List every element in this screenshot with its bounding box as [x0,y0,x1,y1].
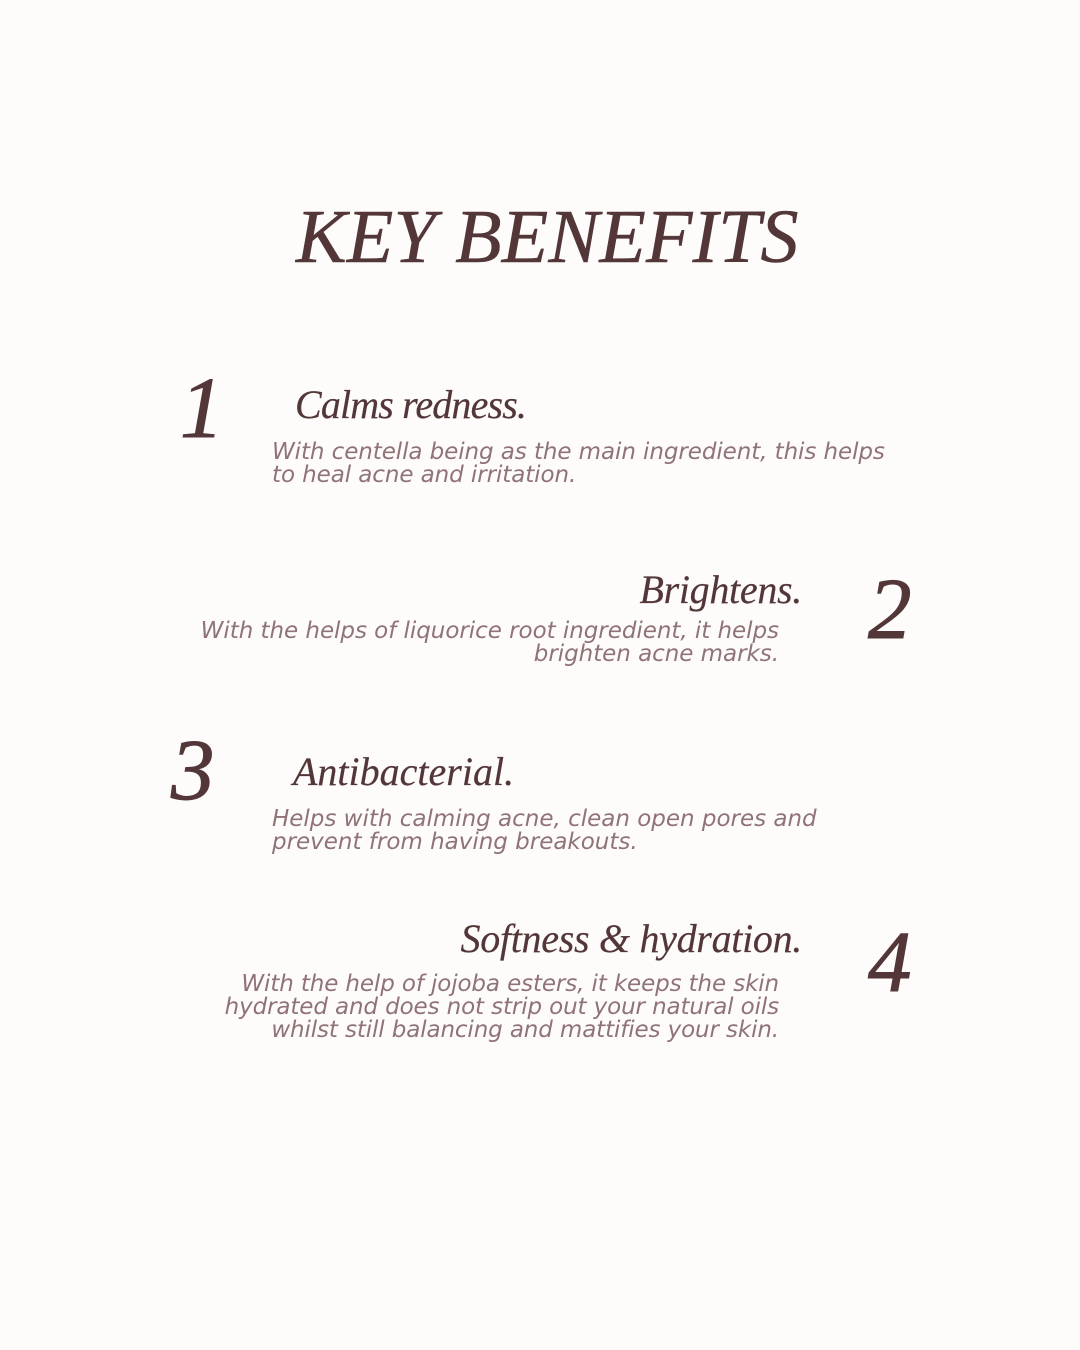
benefit 1 text [272,439,885,488]
number 3: 3 [171,721,214,818]
benefit 4 text: With the help of jojoba esters, it keeps the skin [241,971,779,997]
benefit 1 text: to heal acne and irritation. [272,462,576,488]
benefit 3 heading: Antibacterial. [293,749,514,794]
benefit 1 text: With centella being as the main ingredient, this helps [272,439,885,465]
number 1: 1 [180,359,224,456]
benefit 2 text [201,618,779,667]
benefit 3 text: prevent from having breakouts. [272,829,638,855]
benefit 3 text [272,806,817,855]
benefit 4 text [225,971,779,1043]
benefit 1 heading: Calms redness. [295,382,526,427]
benefit 2 text: With the helps of liquorice root ingredient, it helps [201,618,779,644]
number 2: 2 [868,560,912,657]
number 4: 4 [868,913,912,1010]
benefit 2 heading: Brightens. [639,567,802,612]
benefit 4 heading: Softness & hydration. [461,916,802,961]
benefit 2 text: brighten acne marks. [534,641,779,667]
benefit 4 text: hydrated and does not strip out your natural oils [225,994,779,1020]
benefit 4 text: whilst still balancing and mattifies your skin. [271,1017,779,1043]
title: KEY BENEFITS [296,195,799,279]
benefit 3 text: Helps with calming acne, clean open pores and [272,806,817,832]
